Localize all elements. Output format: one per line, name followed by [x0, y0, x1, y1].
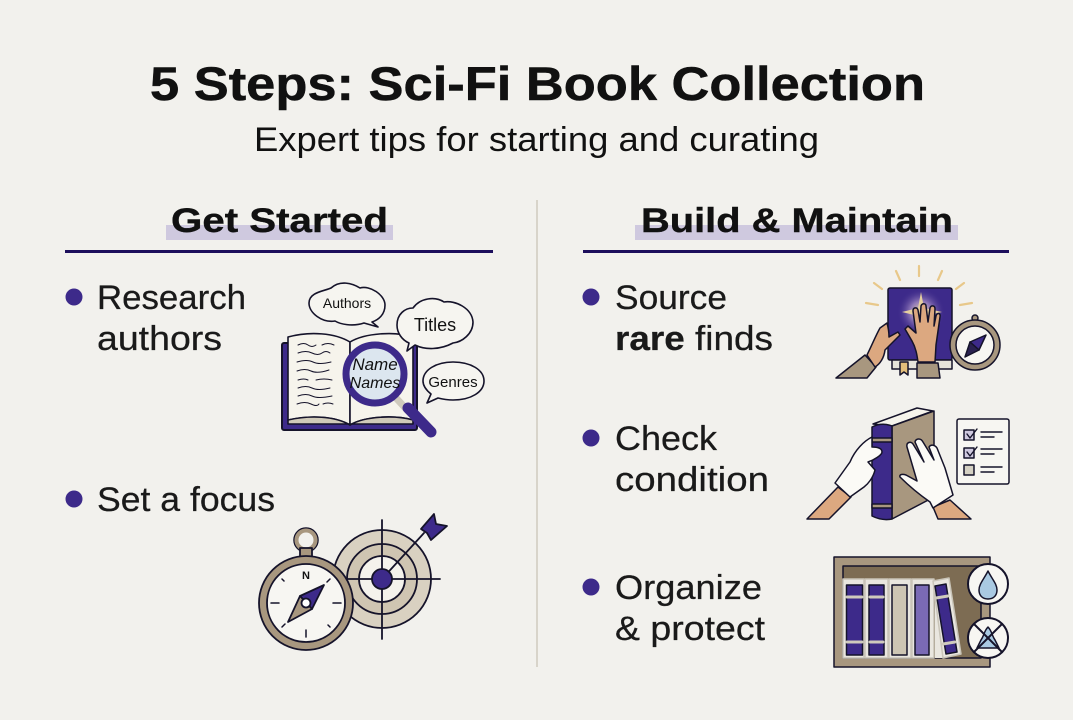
heading: build and maintain: Build & Maintain [641, 202, 953, 240]
title: 5 Steps: Sci-Fi Book Collection [150, 57, 925, 110]
subtitle: Expert tips for starting and curating [254, 121, 819, 159]
text block: research authors: Research [97, 279, 246, 317]
text block: source rare finds: rare finds [615, 320, 773, 358]
icon: open book with magnifier and speech bubbles: Names [350, 375, 400, 392]
icon: gloved hands on book with checklist [807, 408, 1009, 520]
icon: hands on glowing book with compass [836, 266, 1000, 378]
icon: compass and target with arrow [259, 514, 447, 650]
icon: open book with magnifier and speech bubbles [282, 283, 484, 432]
panel: build and maintain [582, 202, 1009, 667]
icon: open book with magnifier and speech bubbles: Titles [414, 315, 456, 335]
icon: compass and target with arrow: N [302, 570, 310, 582]
text block: check condition: Check [615, 420, 718, 458]
text block: source rare finds: Source [615, 279, 727, 317]
icon: open book with magnifier and speech bubbles: Name [352, 355, 398, 374]
text block: organize and protect [582, 569, 766, 648]
text block: check condition: condition [615, 461, 769, 499]
text block: organize and protect: Organize [615, 569, 762, 607]
icon: bookshelf with water and sun protection [834, 557, 1008, 667]
text block: set a focus: Set a focus [97, 481, 275, 519]
text block: check condition [582, 420, 769, 499]
text block: research authors: authors [97, 320, 222, 358]
panel: get started [65, 202, 493, 650]
icon: open book with magnifier and speech bubbles: Genres [428, 374, 478, 391]
icon: open book with magnifier and speech bubbles: Authors [323, 295, 371, 311]
heading: get started: Get Started [171, 202, 388, 240]
text block: source rare finds [582, 279, 773, 358]
heading: get started [65, 202, 493, 253]
text block: organize and protect: & protect [615, 610, 766, 648]
heading: build and maintain [583, 202, 1009, 253]
text block: research authors [66, 279, 246, 358]
